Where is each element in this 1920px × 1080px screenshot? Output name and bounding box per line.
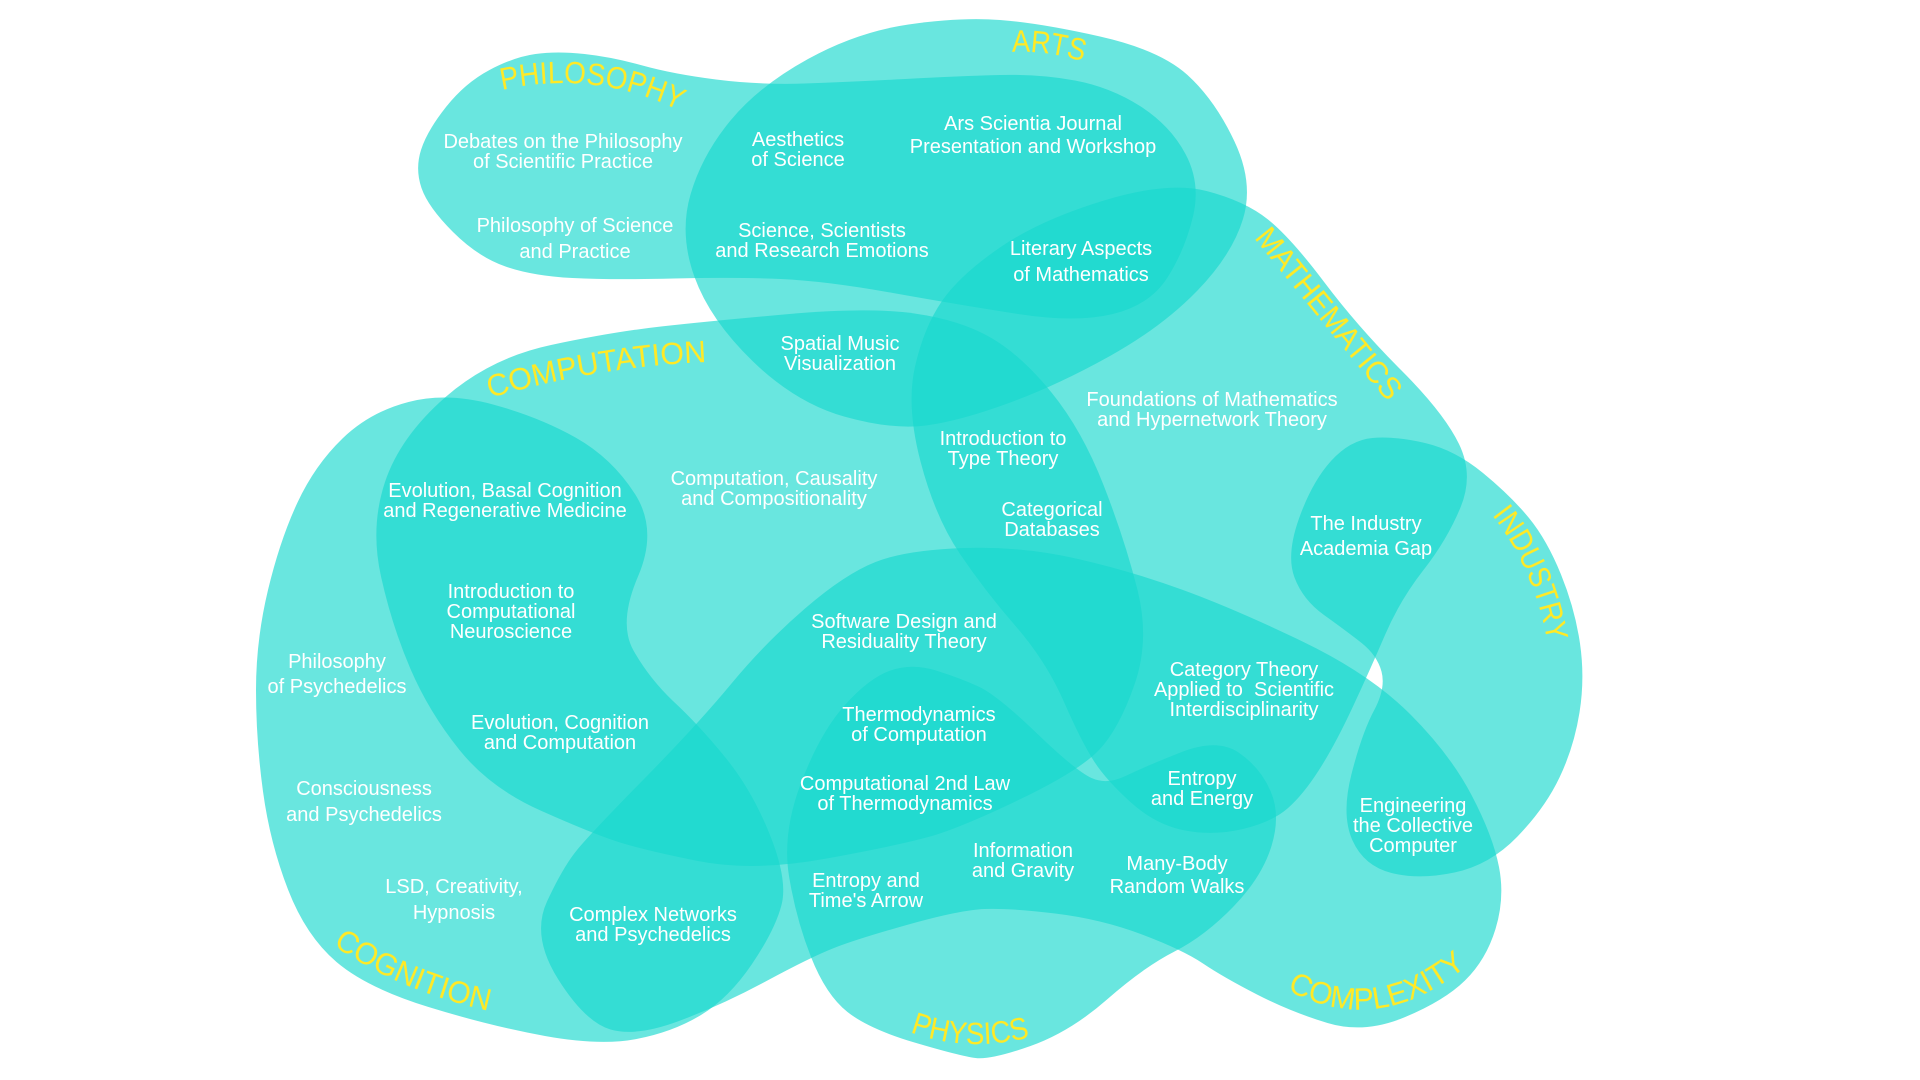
text: ars scientia journal presentation and workshop: Presentation and Workshop xyxy=(910,136,1156,158)
text: aesthetics of science: of Science xyxy=(751,149,845,171)
text: the industry academia gap: The Industry xyxy=(1310,513,1422,535)
text: foundations of mathematics and hypernetwork theory: and Hypernetwork Theory xyxy=(1097,409,1327,431)
blob: cognition xyxy=(256,398,783,1042)
text: introduction to computational neuroscience: Introduction to xyxy=(448,581,574,603)
text: complex networks and psychedelics: and Psychedelics xyxy=(575,924,731,946)
text: categorical databases: Categorical xyxy=(1001,499,1103,521)
text: literary aspects of mathematics: of Mathematics xyxy=(1013,264,1149,286)
text: philosophy of psychedelics: Philosophy xyxy=(288,651,386,673)
blob: physics xyxy=(787,667,1276,1058)
text: consciousness and psychedelics: Consciousness xyxy=(296,778,432,800)
text: introduction to type theory: Type Theory xyxy=(948,448,1058,470)
text: computational 2nd law of thermodynamics: Computational 2nd Law xyxy=(800,773,1011,795)
text: introduction to type theory: Introduction to xyxy=(940,428,1066,450)
text: evolution, basal cognition and regenerative medicine: Evolution, Basal Cognition xyxy=(388,480,622,502)
blob: complexity xyxy=(541,548,1501,1032)
text: entropy and time's arrow: Entropy and xyxy=(812,870,920,892)
text: computation, causality and compositionality: and Compositionality xyxy=(681,488,867,510)
text: entropy and energy: and Energy xyxy=(1151,788,1253,810)
text: foundations of mathematics and hypernetwork theory: Foundations of Mathematics xyxy=(1086,389,1338,411)
text: evolution, basal cognition and regenerative medicine: and Regenerative Medicine xyxy=(383,500,627,522)
text: computational 2nd law of thermodynamics: of Thermodynamics xyxy=(817,793,993,815)
text: philosophy of science and practice: Philosophy of Science xyxy=(477,215,673,237)
text: science, scientists and research emotions: Science, Scientists xyxy=(738,220,906,242)
text: information and gravity: Information xyxy=(973,840,1073,862)
text: consciousness and psychedelics: and Psychedelics xyxy=(286,804,442,826)
text: entropy and time's arrow: Time's Arrow xyxy=(809,890,924,912)
text: philosophy of psychedelics: of Psychedelics xyxy=(268,676,406,698)
text: ars scientia journal presentation and workshop: Ars Scientia Journal xyxy=(944,113,1122,135)
text: many-body random walks: Random Walks xyxy=(1110,876,1244,898)
label: cognition: COGNITION xyxy=(338,932,491,1010)
text: introduction to computational neuroscience: Computational xyxy=(447,601,575,623)
text: information and gravity: and Gravity xyxy=(972,860,1074,882)
label: complexity: COMPLEXITY xyxy=(1291,950,1460,1010)
text: category theory applied to scientific interdisciplinarity: Category Theory xyxy=(1170,659,1318,681)
label: industry: INDUSTRY xyxy=(1494,504,1568,637)
text: evolution, cognition and computation: Evolution, Cognition xyxy=(471,712,649,734)
label: computation: COMPUTATION xyxy=(488,340,704,396)
label: physics: PHYSICS xyxy=(912,1012,1028,1044)
text: entropy and energy: Entropy xyxy=(1168,768,1236,790)
text: introduction to computational neuroscience: Neuroscience xyxy=(450,621,572,643)
label: arts: ARTS xyxy=(1012,30,1086,60)
label: philosophy: PHILOSOPHY xyxy=(500,62,688,108)
blob: philosophy xyxy=(418,52,1196,318)
text: thermodynamics of computation: of Computation xyxy=(851,724,987,746)
text: categorical databases: Databases xyxy=(1004,519,1100,541)
text: computation, causality and compositionality: Computation, Causality xyxy=(671,468,877,490)
text: category theory applied to scientific interdisciplinarity: Applied to Scientific xyxy=(1154,679,1334,701)
text: lsd, creativity, hypnosis: LSD, Creativity, xyxy=(385,876,523,898)
text: category theory applied to scientific interdisciplinarity: Interdisciplinarity xyxy=(1170,699,1318,721)
blob: computation xyxy=(376,310,1143,866)
text: engineering the collective computer: Engineering xyxy=(1360,795,1466,817)
blob: mathematics xyxy=(912,188,1467,833)
blob: arts xyxy=(686,19,1247,427)
text: aesthetics of science: Aesthetics xyxy=(752,129,844,151)
text: spatial music visualization: Visualization xyxy=(784,353,896,375)
text: software design and residuality theory: Software Design and xyxy=(811,611,997,633)
blob: industry xyxy=(1291,438,1582,876)
text: evolution, cognition and computation: and Computation xyxy=(484,732,636,754)
text: engineering the collective computer: the Collective xyxy=(1353,815,1473,837)
text: science, scientists and research emotions: and Research Emotions xyxy=(715,240,929,262)
text: complex networks and psychedelics: Complex Networks xyxy=(569,904,737,926)
text: lsd, creativity, hypnosis: Hypnosis xyxy=(413,902,495,924)
text: debates on the philosophy of scientific practice: Debates on the Philosophy xyxy=(443,131,683,153)
text: many-body random walks: Many-Body xyxy=(1126,853,1228,875)
text: thermodynamics of computation: Thermodynamics xyxy=(842,704,996,726)
text: software design and residuality theory: Residuality Theory xyxy=(821,631,987,653)
text: debates on the philosophy of scientific practice: of Scientific Practice xyxy=(473,151,653,173)
text: the industry academia gap: Academia Gap xyxy=(1300,538,1432,560)
text: literary aspects of mathematics: Literary Aspects xyxy=(1010,238,1152,260)
label: mathematics: MATHEMATICS xyxy=(1255,226,1401,399)
text: spatial music visualization: Spatial Music xyxy=(781,333,899,355)
text: engineering the collective computer: Computer xyxy=(1369,835,1457,857)
text: philosophy of science and practice: and Practice xyxy=(519,241,631,263)
